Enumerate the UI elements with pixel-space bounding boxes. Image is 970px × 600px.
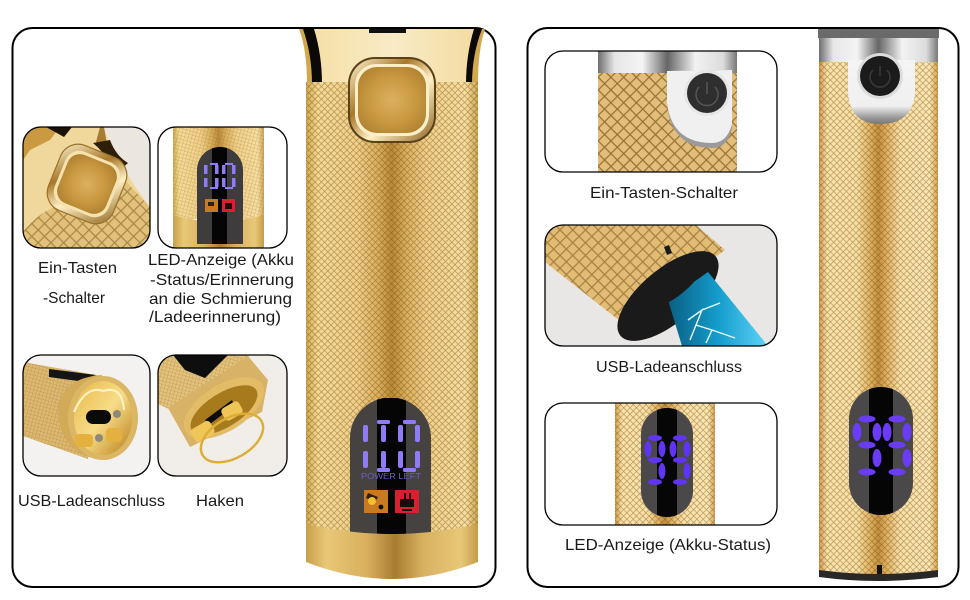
caption: LED-Anzeige left [148, 252, 294, 326]
thumbnail: LED close-up [158, 127, 287, 248]
icon: lubrication reminder [364, 490, 388, 513]
icon: power button [684, 70, 730, 116]
silver cut-out [848, 60, 915, 124]
battery digits [363, 420, 420, 472]
caption: USB-Ladeanschluss right: USB-Ladeanschluss [596, 359, 742, 376]
caption: LED-Anzeige left: -Status/Erinnerung [150, 272, 294, 289]
caption: USB-Ladeanschluss left: USB-Ladeanschluss [18, 493, 165, 510]
caption: Haken: Haken [196, 493, 244, 510]
caption: Ein-Tasten-Schalter left [38, 260, 117, 307]
icon: charging reminder [395, 490, 419, 513]
thumbnail: USB port [23, 355, 150, 476]
caption: LED-Anzeige right: LED-Anzeige (Akku-Status) [565, 537, 771, 554]
thumbnail: charging port with lightning [545, 225, 777, 357]
main gold trimmer photo [299, 29, 485, 579]
caption: LED-Anzeige left: LED-Anzeige (Akku [148, 252, 294, 269]
gold collar [306, 524, 478, 579]
gold square button [348, 57, 436, 143]
LED window [350, 398, 431, 538]
caption: Ein-Tasten-Schalter right: Ein-Tasten-Schalter [590, 185, 739, 202]
power left label: POWER LEFT [361, 472, 421, 481]
LED window [849, 387, 913, 515]
thumbnail: button close-up [23, 127, 150, 248]
icon: power button [857, 53, 903, 99]
knurled body [306, 82, 478, 540]
digits 99 [644, 435, 690, 485]
thumbnail: power button close-up [545, 51, 777, 172]
caption: LED-Anzeige left: an die Schmierung [149, 291, 292, 308]
main slim trimmer photo [818, 29, 939, 581]
thumbnail: LED close-up [545, 403, 777, 525]
digits 99 [852, 416, 912, 476]
trimmer neck [299, 29, 485, 84]
knurled body [819, 62, 938, 574]
silver top [818, 29, 939, 64]
caption: Ein-Tasten-Schalter left: -Schalter [43, 290, 106, 307]
thumbnail: hook [158, 355, 287, 476]
caption: LED-Anzeige left: /Ladeerinnerung) [149, 309, 281, 326]
base band [819, 565, 938, 581]
caption: Ein-Tasten-Schalter left: Ein-Tasten [38, 260, 117, 277]
panel: right silver-top trimmer [528, 28, 958, 587]
panel: left gold trimmer [12, 28, 496, 587]
